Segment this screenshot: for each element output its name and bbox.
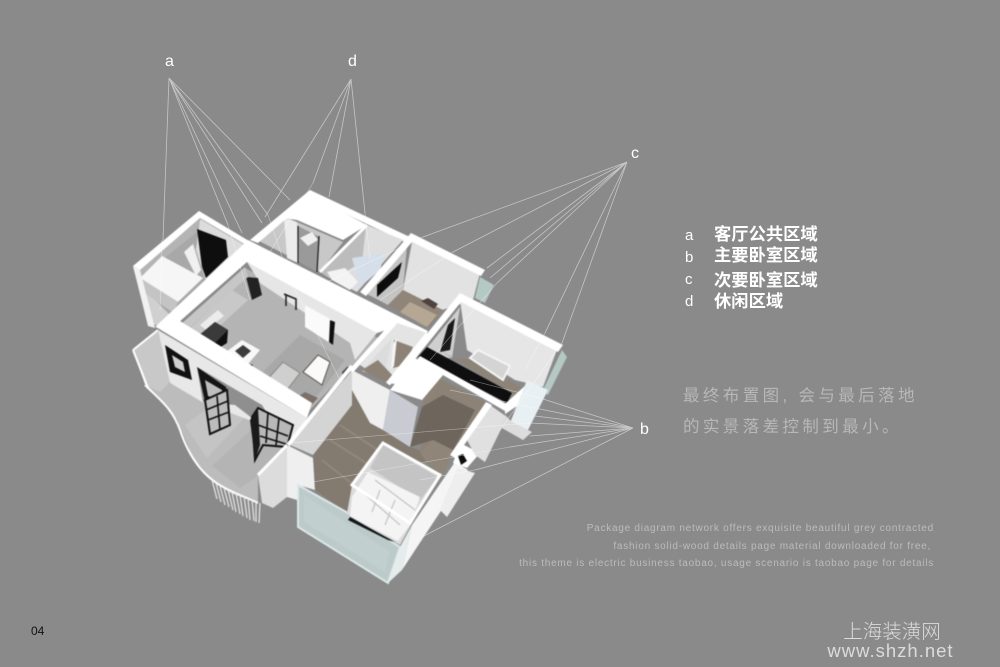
legend: 主要卧室区域 — [714, 245, 818, 265]
wardrobe area — [383, 356, 510, 473]
shower room — [320, 225, 403, 292]
legend: c — [685, 271, 693, 288]
page number: 04 — [31, 624, 45, 638]
balcony glass — [298, 485, 400, 583]
terrace side wall — [133, 330, 170, 392]
glass doors — [197, 367, 293, 460]
english description — [519, 523, 934, 569]
right outer walls — [388, 380, 548, 583]
upper-left bathroom room — [250, 190, 412, 272]
study room — [360, 233, 494, 327]
watermark: www.shzh.net — [826, 640, 954, 661]
legend: 客厅公共区域 — [714, 224, 818, 244]
label c: c — [631, 145, 639, 162]
living room white wall band — [155, 240, 428, 337]
top-left room — [133, 211, 249, 328]
living front wall — [156, 316, 312, 445]
english description: fashion solid-wood details page material downloaded for free, — [613, 541, 931, 552]
label d: d — [348, 53, 357, 70]
terrace floor — [145, 383, 287, 523]
chinese description: 的实景落差控制到最小。 — [683, 417, 902, 436]
kitchen — [188, 290, 260, 380]
watermark — [826, 621, 954, 661]
english description: Package diagram network offers exquisite beautiful grey contracted — [587, 523, 934, 534]
wood floor bedroom — [288, 366, 435, 513]
floor plan model — [133, 190, 567, 583]
leader lines behind model — [163, 78, 633, 538]
legend: d — [685, 293, 693, 310]
chinese description — [683, 386, 918, 436]
living room floor — [180, 262, 378, 410]
glass bed box — [347, 443, 440, 545]
terrace right wall — [258, 445, 315, 508]
legend: 休闲区域 — [714, 291, 783, 311]
small room — [351, 320, 428, 384]
legend: a — [685, 227, 694, 244]
right upper room — [387, 293, 567, 403]
sofa and armchair — [265, 355, 350, 412]
legend — [685, 224, 818, 311]
english description: this theme is electric business taobao, usage scenario is taobao page for details — [519, 558, 934, 569]
leader lines over model — [160, 183, 562, 482]
legend: 次要卧室区域 — [714, 270, 818, 290]
watermark: 上海装潢网 — [843, 621, 941, 643]
chinese description: 最终布置图, 会与最后落地 — [683, 386, 918, 405]
label b: b — [640, 421, 649, 438]
label a: a — [165, 53, 174, 70]
legend: b — [685, 249, 693, 266]
